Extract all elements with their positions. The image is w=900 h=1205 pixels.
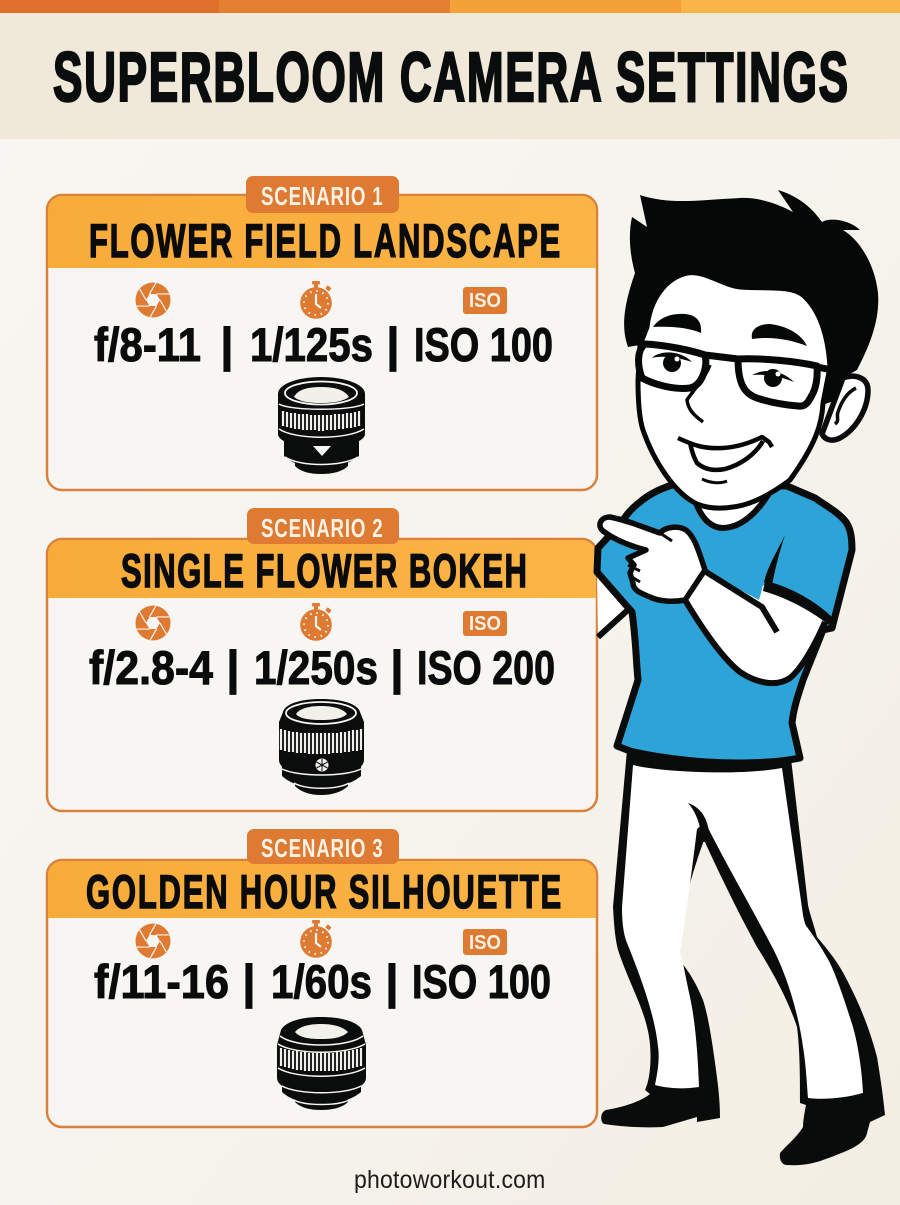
scenario 3 header band <box>48 861 596 918</box>
scenario 2 settings: f/2.8-4 <box>89 641 213 694</box>
panel: scenario 1 <box>47 176 597 490</box>
scenario 3 heading: GOLDEN HOUR SILHOUETTE <box>86 867 561 919</box>
illustration: man pointing at cards <box>597 190 885 1165</box>
sleeve crease <box>764 535 785 585</box>
ear <box>822 376 868 440</box>
nose <box>687 365 710 422</box>
eyebrows <box>653 314 807 346</box>
scenario 3 badge <box>247 829 399 864</box>
title: SUPERBLOOM CAMERA SETTINGS <box>53 39 848 117</box>
scenario 2 header band <box>48 540 596 598</box>
top colour bar <box>0 0 900 13</box>
panel: scenario 2 <box>47 508 597 811</box>
icon: ISO badge: ISO <box>469 932 501 954</box>
icon: ISO badge <box>463 929 507 955</box>
scenario 2 settings: | <box>226 641 240 694</box>
scenario 3 settings: | <box>385 955 399 1008</box>
hair <box>624 190 878 405</box>
hand finger details <box>628 533 672 582</box>
icon: aperture <box>136 282 170 318</box>
scenario 2 settings <box>89 641 555 694</box>
scenario 2 badge: SCENARIO 2 <box>261 513 383 543</box>
scenario 1 badge <box>246 176 399 213</box>
scenario 1 settings: | <box>386 318 400 371</box>
icon: ISO badge: ISO <box>469 613 501 635</box>
forearm and upper arm <box>685 570 830 683</box>
scenario 2 settings: ISO 200 <box>417 641 555 694</box>
icon: ISO badge <box>463 287 507 314</box>
icon: ISO badge: ISO <box>469 290 501 312</box>
scenario 2 badge <box>247 508 399 544</box>
glasses <box>639 344 832 406</box>
scenario 3 badge: SCENARIO 3 <box>261 833 383 863</box>
icon: aperture <box>136 924 170 958</box>
scenario 3 settings: f/11-16 <box>94 955 229 1008</box>
scenario 1 header band <box>48 196 596 268</box>
panel: scenario 3 <box>47 829 597 1127</box>
left arm behind body <box>597 575 628 637</box>
scenario 1 settings: 1/125s <box>250 318 373 371</box>
neck and collar <box>695 495 768 528</box>
smile <box>678 437 772 470</box>
chin line <box>702 479 727 483</box>
scenario 2 settings: | <box>390 641 404 694</box>
scenario 2 heading: SINGLE FLOWER BOKEH <box>121 546 527 598</box>
t-shirt <box>597 485 852 763</box>
icon: ISO badge <box>463 611 507 636</box>
scenario 1 settings: | <box>220 318 234 371</box>
scenario 1 settings: ISO 100 <box>414 318 553 371</box>
icon: timer <box>300 920 332 958</box>
face <box>638 273 830 508</box>
scenario 1 settings <box>94 318 553 371</box>
scenario 3 settings: | <box>242 955 256 1008</box>
title banner <box>0 13 900 139</box>
scenario 1 badge: SCENARIO 1 <box>261 181 383 211</box>
footer website: photoworkout.com <box>354 1166 545 1194</box>
scenario 3 settings <box>94 955 551 1008</box>
scenario 1 heading: FLOWER FIELD LANDSCAPE <box>89 216 560 268</box>
icon: lens 1 <box>278 377 365 474</box>
scenario 1 settings: f/8-11 <box>94 318 201 371</box>
icon: aperture <box>136 606 170 640</box>
scenario 3 settings: 1/60s <box>271 955 372 1008</box>
sleeve cuff <box>763 581 832 625</box>
scenario 3 settings: ISO 100 <box>412 955 551 1008</box>
pants and shoes <box>601 750 885 1165</box>
icon: lens 2 <box>279 699 364 795</box>
icon: timer <box>300 603 332 641</box>
icon: timer <box>300 281 332 319</box>
eyes <box>652 352 794 387</box>
icon: lens 3 <box>277 1017 366 1110</box>
scenario 2 settings: 1/250s <box>254 641 378 694</box>
pointing hand <box>600 517 705 601</box>
